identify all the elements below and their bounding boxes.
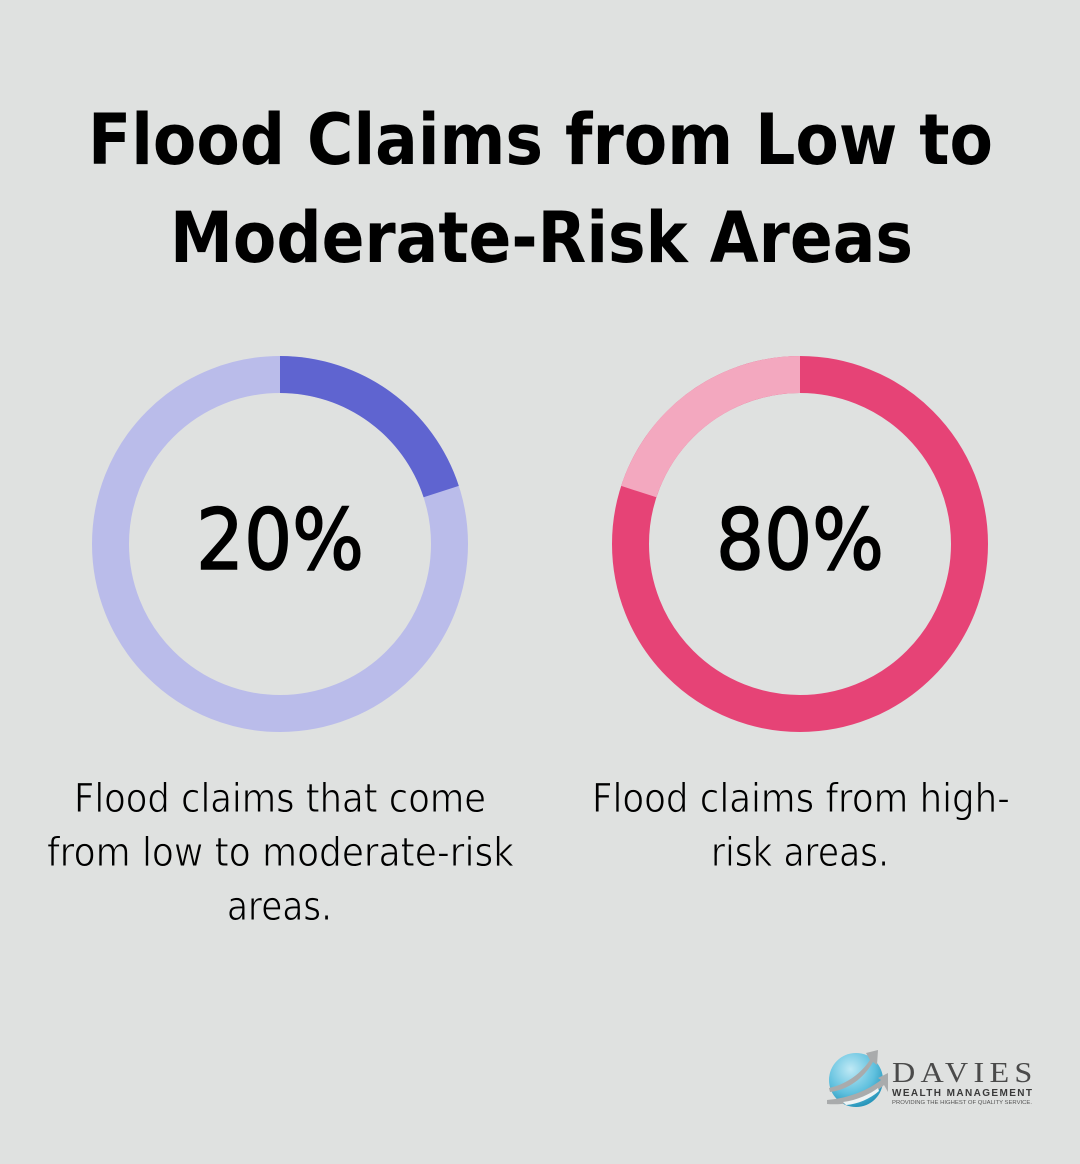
logo tagline: PROVIDING THE HIGHEST OF QUALITY SERVICE.: [892, 1100, 1032, 1106]
description: low to moderate-risk: areas.: [227, 884, 332, 930]
donut chart: 80%: [621, 356, 970, 714]
description: low to moderate-risk: from low to moderate-risk: [47, 830, 515, 876]
description: high-risk: [592, 776, 1010, 876]
title: Flood Claims from Low to: [88, 99, 993, 181]
panel: low to moderate-risk claims: [47, 356, 515, 930]
donut chart: 20%: [110, 356, 459, 714]
description: high-risk: Flood claims from high-: [592, 776, 1010, 822]
title: Moderate-Risk Areas: [170, 197, 913, 279]
logo subtitle: WEALTH MANAGEMENT: [892, 1088, 1032, 1099]
panel: high-risk claims: [592, 356, 1010, 876]
value: 20%: 20%: [196, 491, 364, 589]
icon: globe with arrows: [827, 1050, 888, 1107]
value: 80%: 80%: [716, 491, 884, 589]
description: high-risk: risk areas.: [711, 830, 889, 876]
description: low to moderate-risk: Flood claims that come: [74, 776, 486, 822]
logo: Davies Wealth Management: [827, 1050, 1032, 1107]
logo wordmark: DAVIES: [892, 1057, 1032, 1088]
description: low to moderate-risk: [47, 776, 515, 930]
title: [88, 99, 993, 279]
